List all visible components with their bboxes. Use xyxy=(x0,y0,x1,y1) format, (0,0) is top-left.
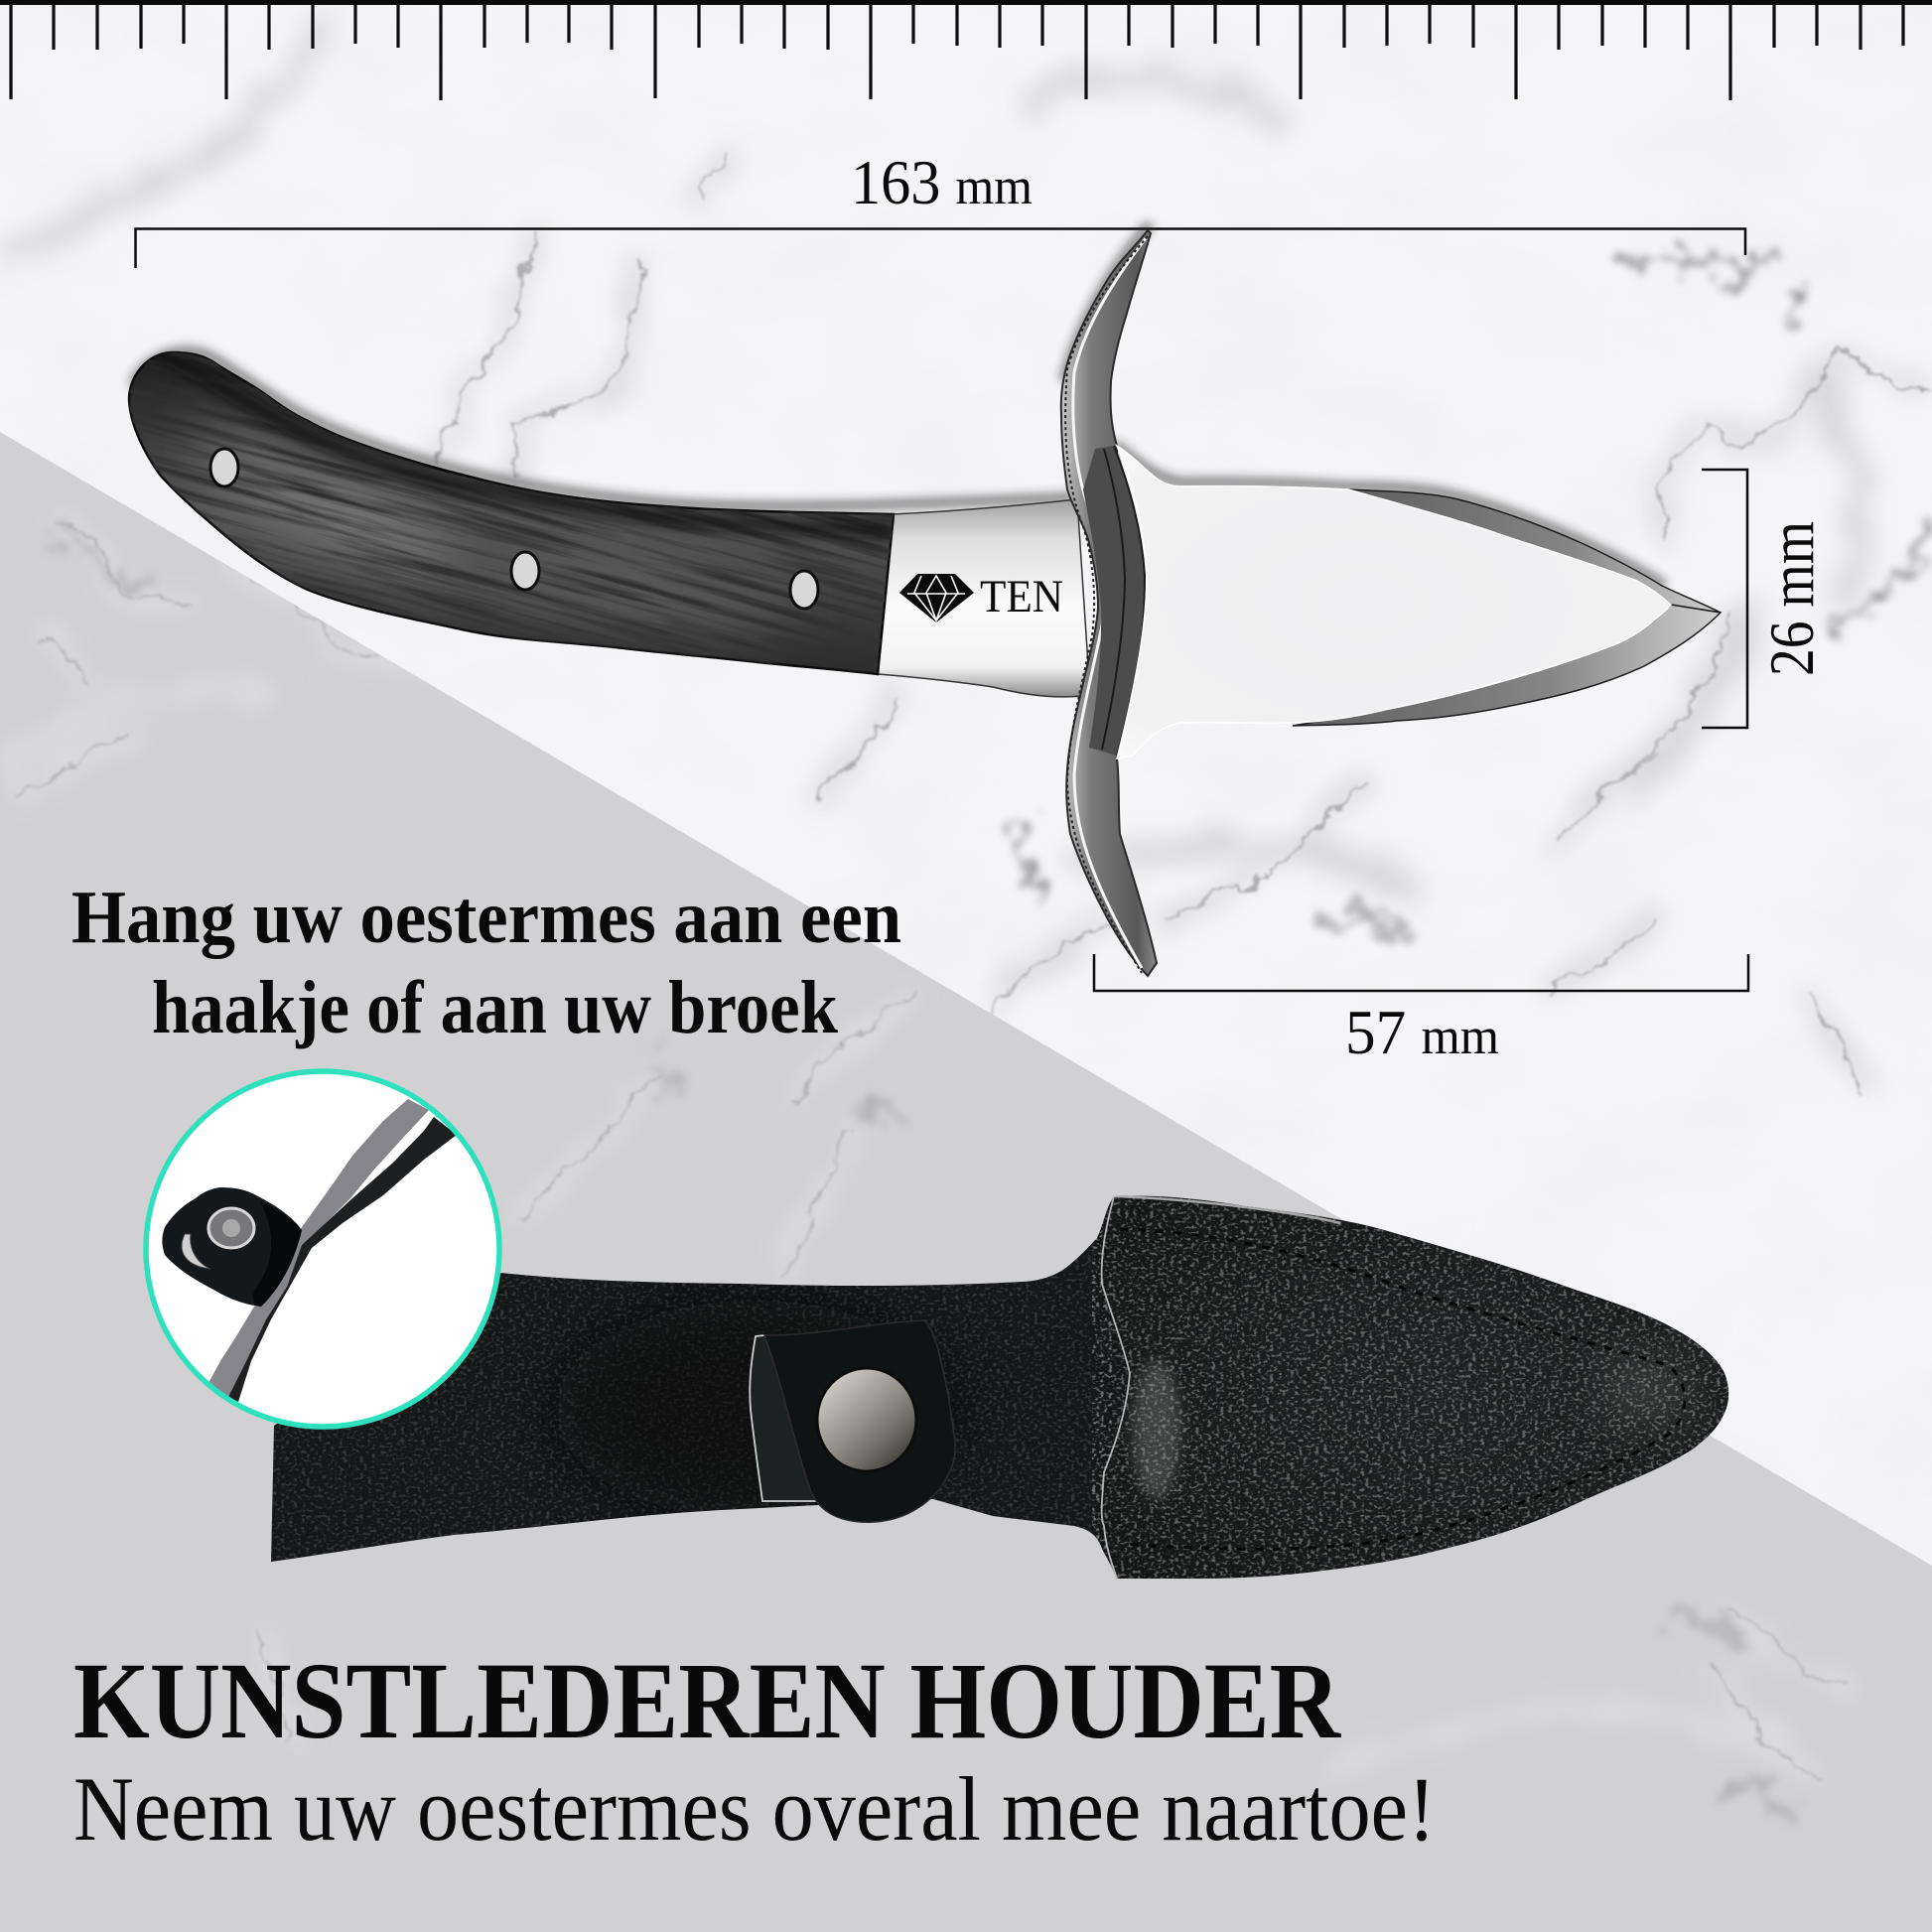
pocket edge xyxy=(1102,1196,1130,1579)
heading: hang instruction xyxy=(71,876,901,1049)
dimension: blade length 57 mm xyxy=(1094,954,1748,1067)
oyster knife xyxy=(123,216,1722,978)
guard xyxy=(1061,230,1157,976)
subtitle: Neem uw oestermes overal mee naartoe! xyxy=(73,1758,1436,1860)
guard dark slot xyxy=(1083,446,1145,756)
dimension: total length 163 mm xyxy=(135,148,1745,268)
logo text: TEN: TEN xyxy=(980,571,1063,622)
circular inset: sheath on belt xyxy=(146,1071,499,1427)
dark belt strap xyxy=(228,1117,457,1402)
front snap xyxy=(208,1208,254,1248)
label: 57 mm: 57 mm xyxy=(1345,998,1499,1067)
sheath body xyxy=(258,1181,1737,1588)
icon: diamond logo xyxy=(899,574,974,622)
rivets xyxy=(210,449,818,609)
blade face xyxy=(1117,446,1671,759)
title: KUNSTLEDEREN HOUDER xyxy=(73,1640,1341,1761)
label: 26 mm: 26 mm xyxy=(1757,521,1827,676)
sheath pocket xyxy=(1102,1196,1728,1580)
bolster with logo xyxy=(878,499,1090,697)
label: 163 mm: 163 mm xyxy=(851,148,1033,217)
leather sheath xyxy=(258,1181,1737,1588)
leather loop xyxy=(162,1187,302,1307)
snap loop tab xyxy=(750,1320,955,1522)
rear snap xyxy=(182,1234,210,1269)
knife shadow xyxy=(134,226,1662,584)
dimension: blade width 26 mm xyxy=(1702,470,1827,728)
ruler ticks along top edge xyxy=(0,0,1932,100)
teal ring xyxy=(146,1071,499,1427)
heading: hang instruction: Hang uw oestermes aan een xyxy=(71,876,901,959)
background: grey diagonal panel xyxy=(0,432,1932,1932)
blade bevels xyxy=(1293,489,1721,726)
handle xyxy=(127,351,896,675)
icon: metal snap stud xyxy=(817,1368,916,1471)
heading line two: haakje of aan uw broek xyxy=(152,966,839,1049)
grey belt strap xyxy=(208,1099,429,1397)
stitching xyxy=(1120,1229,1685,1549)
